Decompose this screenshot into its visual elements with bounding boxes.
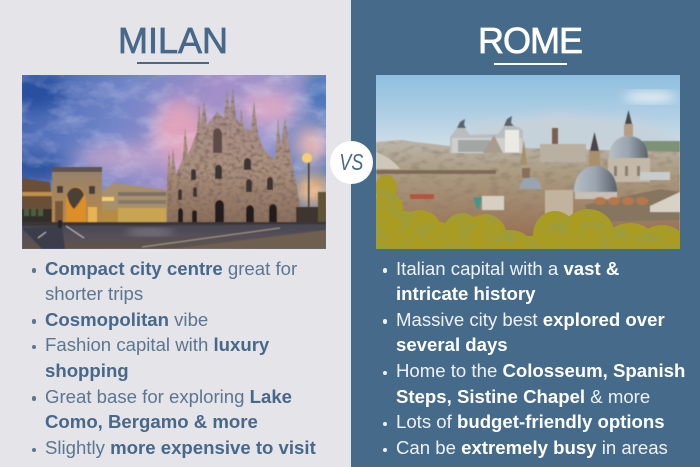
bullet list: Milan: shorter trips [45, 283, 143, 304]
badge: VS: VS [339, 148, 363, 174]
small dome and statue [519, 177, 542, 189]
bullet list: Milan: Como, Bergamo & more [45, 411, 258, 432]
title underline: Milan [137, 62, 209, 64]
tower [552, 128, 558, 145]
lamp post and right edge [296, 207, 326, 222]
bullet list: Rome: several days [396, 334, 508, 355]
bullet list: Rome: Italian capital with a vast & [396, 258, 619, 278]
bullet list: Milan: Great base for exploring Lake [45, 386, 292, 407]
front dome [574, 132, 617, 199]
panel: Milan background [0, 0, 351, 467]
large right dome [608, 110, 650, 182]
ground [22, 222, 326, 249]
cathedral windows [178, 128, 277, 222]
title: Milan: MILAN [118, 20, 228, 61]
bullet list: Rome: Home to the Colosseum, Spanish [396, 360, 685, 381]
bullet list: Rome [383, 258, 685, 458]
bullet list: Rome: Lots of budget-friendly options [396, 411, 665, 432]
bullet list: Rome: Massive city best explored over [396, 309, 665, 330]
left buildings [22, 87, 326, 249]
cloud texture [22, 75, 326, 200]
right facade [102, 183, 167, 222]
bullet list: Rome: Can be extremely busy in areas [396, 437, 668, 458]
panel: Rome background [351, 0, 700, 467]
bullet list: Milan [32, 258, 316, 458]
bullet list: Milan: Compact city centre great for [45, 258, 297, 278]
cathedral [167, 87, 300, 222]
bullet list: Rome: Steps, Sistine Chapel & more [396, 386, 650, 407]
light buildings [545, 190, 573, 220]
bullet list: Rome: intricate history [396, 283, 536, 304]
Vittoriano monument [450, 126, 523, 153]
bullet list: Milan: shopping [45, 360, 129, 381]
trees [372, 175, 684, 260]
badge: VS [330, 140, 372, 184]
distant hills [470, 113, 680, 155]
galleria arch [52, 167, 102, 222]
sky [376, 75, 680, 249]
bullet list: Milan: Cosmopolitan vibe [45, 309, 208, 330]
title: Rome: ROME [478, 20, 582, 61]
sky [22, 75, 326, 249]
bullet list: Milan: Fashion capital with luxury [45, 334, 269, 355]
bullet list: Milan: Slightly more expensive to visit [45, 437, 316, 458]
photo: Rome skyline [376, 75, 680, 249]
city [376, 110, 680, 249]
photo: Milan cathedral at dusk [22, 75, 326, 249]
title underline: Rome [494, 63, 567, 65]
